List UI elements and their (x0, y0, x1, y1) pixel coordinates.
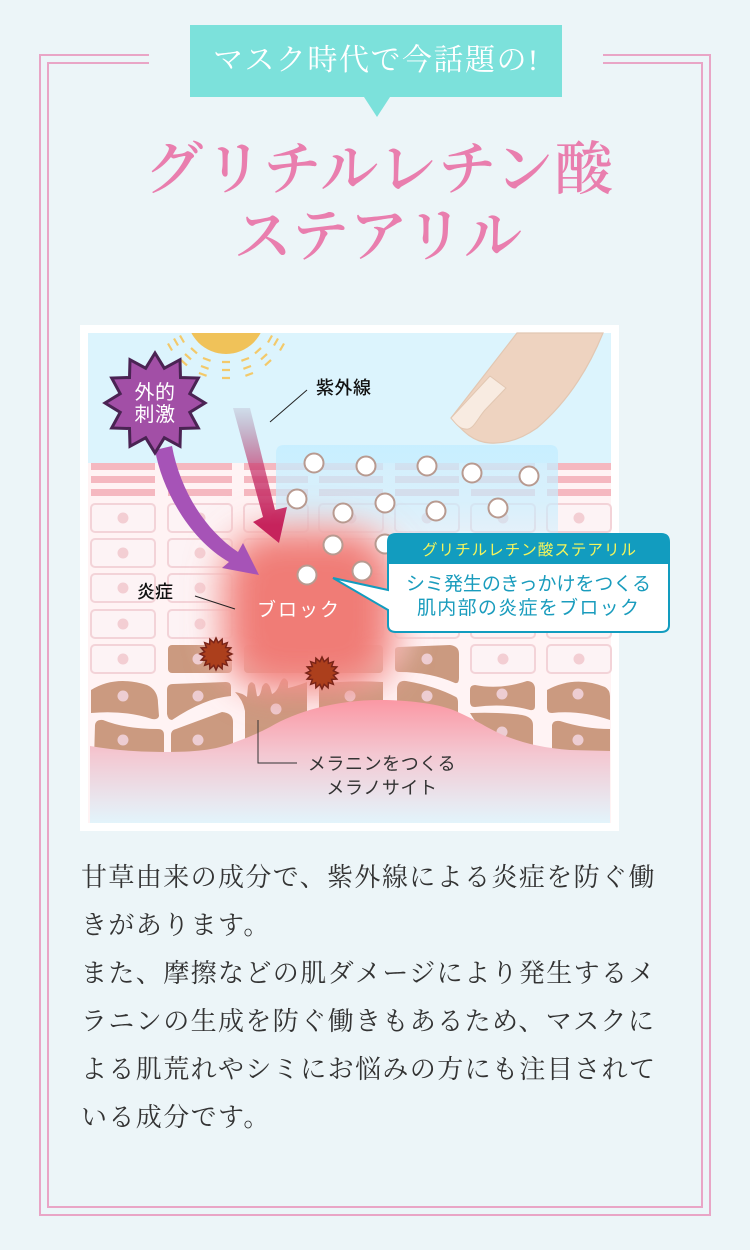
callout: ingredient effect: シミ発生のきっかけをつくる (406, 573, 651, 595)
inflammation sparks (200, 638, 338, 689)
icon: external stimulus burst: 外的 (134, 381, 176, 404)
pale halo around inflammation (212, 530, 408, 680)
title: グリチルレチン酸 (145, 137, 614, 202)
skin cells (91, 504, 611, 673)
pigmented cells (91, 645, 610, 760)
cell nuclei on pigmented cells (118, 654, 584, 746)
horny layer bars (91, 463, 611, 496)
body text (81, 863, 656, 1132)
ingredient particles (288, 454, 538, 584)
label: block: ブロック (257, 598, 339, 621)
body text: 甘草由来の成分で、紫外線による炎症を防ぐ働 (81, 863, 656, 892)
body text: きがあります。 (81, 911, 271, 940)
label: ultraviolet (270, 378, 371, 422)
icon: sun (167, 333, 285, 380)
body text: また、摩擦などの肌ダメージにより発生するメ (81, 959, 656, 988)
body text: ラニンの生成を防ぐ働きもあるため、マスクに (81, 1007, 655, 1036)
title: ステアリル (234, 204, 522, 269)
label: inflammation (137, 582, 235, 609)
callout: ingredient effect: 肌内部の炎症をブロック (417, 596, 639, 619)
body text: よる肌荒れやシミにお悩みの方にも注目されて (81, 1055, 656, 1084)
banner: tagline: マスク時代で今話題の! (213, 44, 538, 77)
dermis mound (90, 700, 610, 823)
label: melanocyte: メラニンをつくる (308, 754, 456, 774)
label: ultraviolet: 紫外線 (316, 378, 371, 398)
cosmetic ingredient film (276, 445, 558, 590)
callout: ingredient effect (333, 534, 669, 632)
arrow: external stimulus (155, 446, 259, 575)
skin layer background (88, 463, 611, 823)
label: melanocyte (258, 720, 456, 798)
label: melanocyte: メラノサイト (326, 778, 438, 798)
label: inflammation: 炎症 (137, 582, 173, 602)
icon: external stimulus burst: 刺激 (134, 403, 176, 426)
icon: finger (451, 333, 603, 443)
panel: skin diagram (80, 276, 619, 831)
callout: ingredient effect: グリチルレチン酸ステアリル (422, 541, 636, 559)
body text: いる成分です。 (81, 1103, 271, 1132)
title (145, 137, 614, 269)
banner: tagline (190, 25, 562, 117)
icon: external stimulus burst (105, 353, 205, 453)
arrow: ultraviolet (233, 408, 287, 543)
inflammation glow (224, 530, 394, 690)
